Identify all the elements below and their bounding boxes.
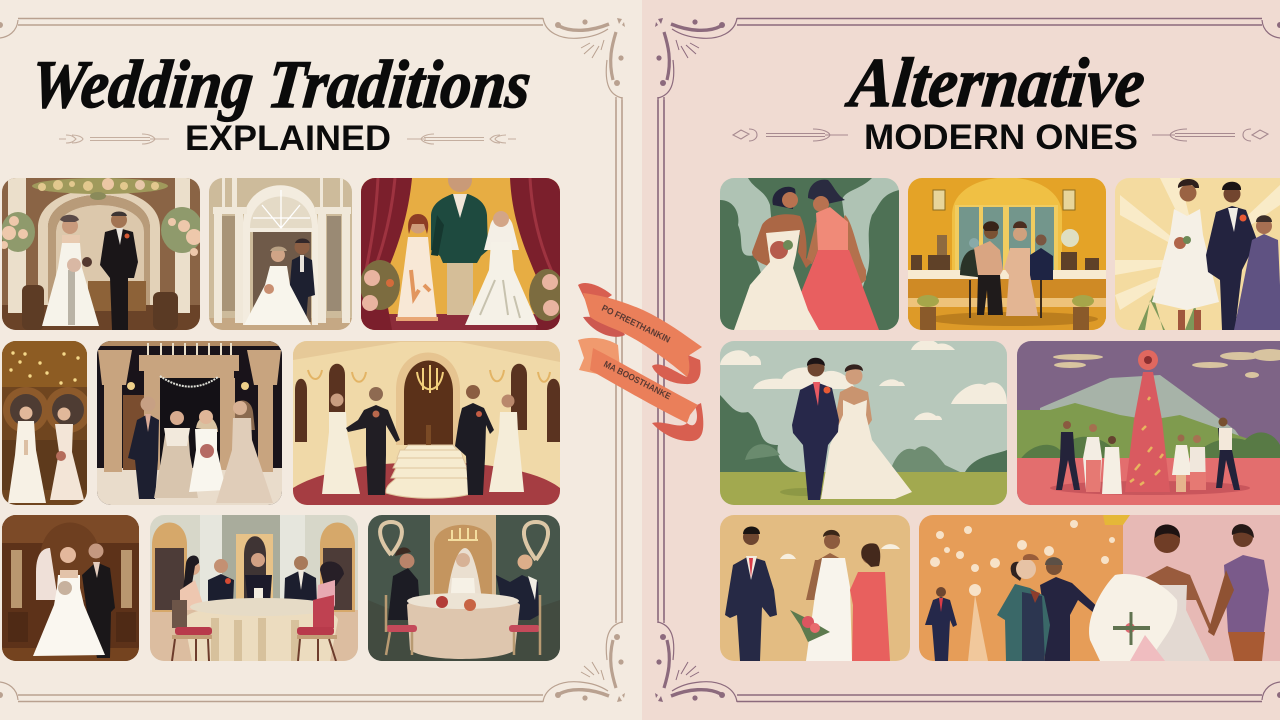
bride and veil [33,547,105,656]
groom [100,212,138,330]
columns [98,350,281,472]
lanterns [933,190,1075,210]
groom [1206,182,1257,330]
shelf items [911,235,1099,270]
panel: candlelit door pair [2,341,91,505]
upper ribbon text: PO FREETHANKIN [600,303,672,345]
panel: red curtain trio [360,168,565,330]
white bride [189,410,226,492]
beige bride [154,411,198,498]
panel: grand ballroom with cake [293,341,560,505]
man in suit [725,526,777,661]
man in purple shirt [1208,524,1269,661]
panel: wood doors couple [2,515,139,661]
left heading flourishes [59,134,516,144]
left background [0,0,642,720]
bride [42,215,99,326]
rope loops [380,522,402,555]
chairs [386,595,540,655]
groom [82,544,115,658]
flower gown tower [1125,350,1170,492]
woman in coral [800,180,879,330]
panel: trio in golden light [720,515,910,661]
chandeliers [308,365,550,393]
lower ribbon text: MA BOOSTHANKE [602,359,673,401]
fairy lights [9,351,80,385]
right group [1172,418,1240,492]
trees [720,395,1007,472]
tiered cake [386,445,475,498]
center connecting ribbons [578,283,703,441]
right background [642,0,1280,720]
subtitle: EXPLAINED: EXPLAINED [185,119,391,158]
seated guests [960,234,1053,280]
bride two [489,394,524,492]
table [407,593,520,659]
right chair [297,595,337,661]
panel: green room banquet [368,515,560,661]
panel: two women in garden [720,178,899,330]
green jacket figure [997,554,1050,661]
bride one [322,394,360,494]
left woman [396,214,438,321]
groom one [346,387,400,495]
panel: yellow hall at counter [908,178,1106,330]
table [184,598,338,661]
panel: volcano and flower gown [1017,341,1280,505]
title: Wedding Traditions: Wedding Traditions [27,46,534,122]
small man [925,587,957,661]
left chair [172,600,212,661]
flowers [360,260,565,321]
second bride [50,408,84,500]
bar stools [970,280,1041,318]
left flowers [0,212,35,252]
bride [244,246,311,325]
windows [295,364,560,442]
clouds [720,340,1007,420]
guests [180,553,344,625]
dark suited man [1040,557,1103,661]
groom [128,396,159,499]
right woman [465,211,538,325]
subtitle: MODERN ONES: MODERN ONES [864,118,1138,157]
veiled bride [447,548,482,605]
panel: sunburst couple with guest [1115,178,1280,330]
windows [152,522,355,612]
panel: orange room and pink room [919,515,1280,661]
left decorative frame [0,18,625,702]
bride [821,364,912,499]
back bride [216,400,273,503]
groom two [455,385,494,495]
panel: white portico ceremony [209,178,352,330]
right flowers [161,207,203,256]
first bride [8,406,46,503]
groom [792,358,839,500]
panel: couple in meadow [720,340,1007,505]
right guest [496,554,539,620]
archway [396,352,460,445]
pink dress bride with petals [1089,524,1212,661]
curtains [361,178,412,330]
left guest [388,547,420,620]
garland [32,178,168,200]
upper ribbon [578,283,702,384]
panel: classic arch ceremony [0,178,203,330]
hanging lights [930,520,1115,596]
groom [431,168,488,315]
bride [806,530,852,661]
left group [1056,421,1122,494]
right heading flourishes [733,129,1268,141]
bride [1152,179,1219,330]
title: Alternative: Alternative [843,44,1148,122]
right decorative frame [655,18,1280,702]
guest in purple [1234,215,1280,330]
panel: dark columned hall [97,341,282,505]
panel: dining room table [150,515,358,661]
couple [974,221,1038,316]
sand clouds [1053,349,1280,378]
bride [734,187,819,330]
groom [290,238,315,316]
plants and side tables [917,295,1094,330]
lower ribbon [578,338,703,441]
doorway [236,534,273,605]
woman in coral [850,543,890,661]
bouquet [790,610,830,642]
